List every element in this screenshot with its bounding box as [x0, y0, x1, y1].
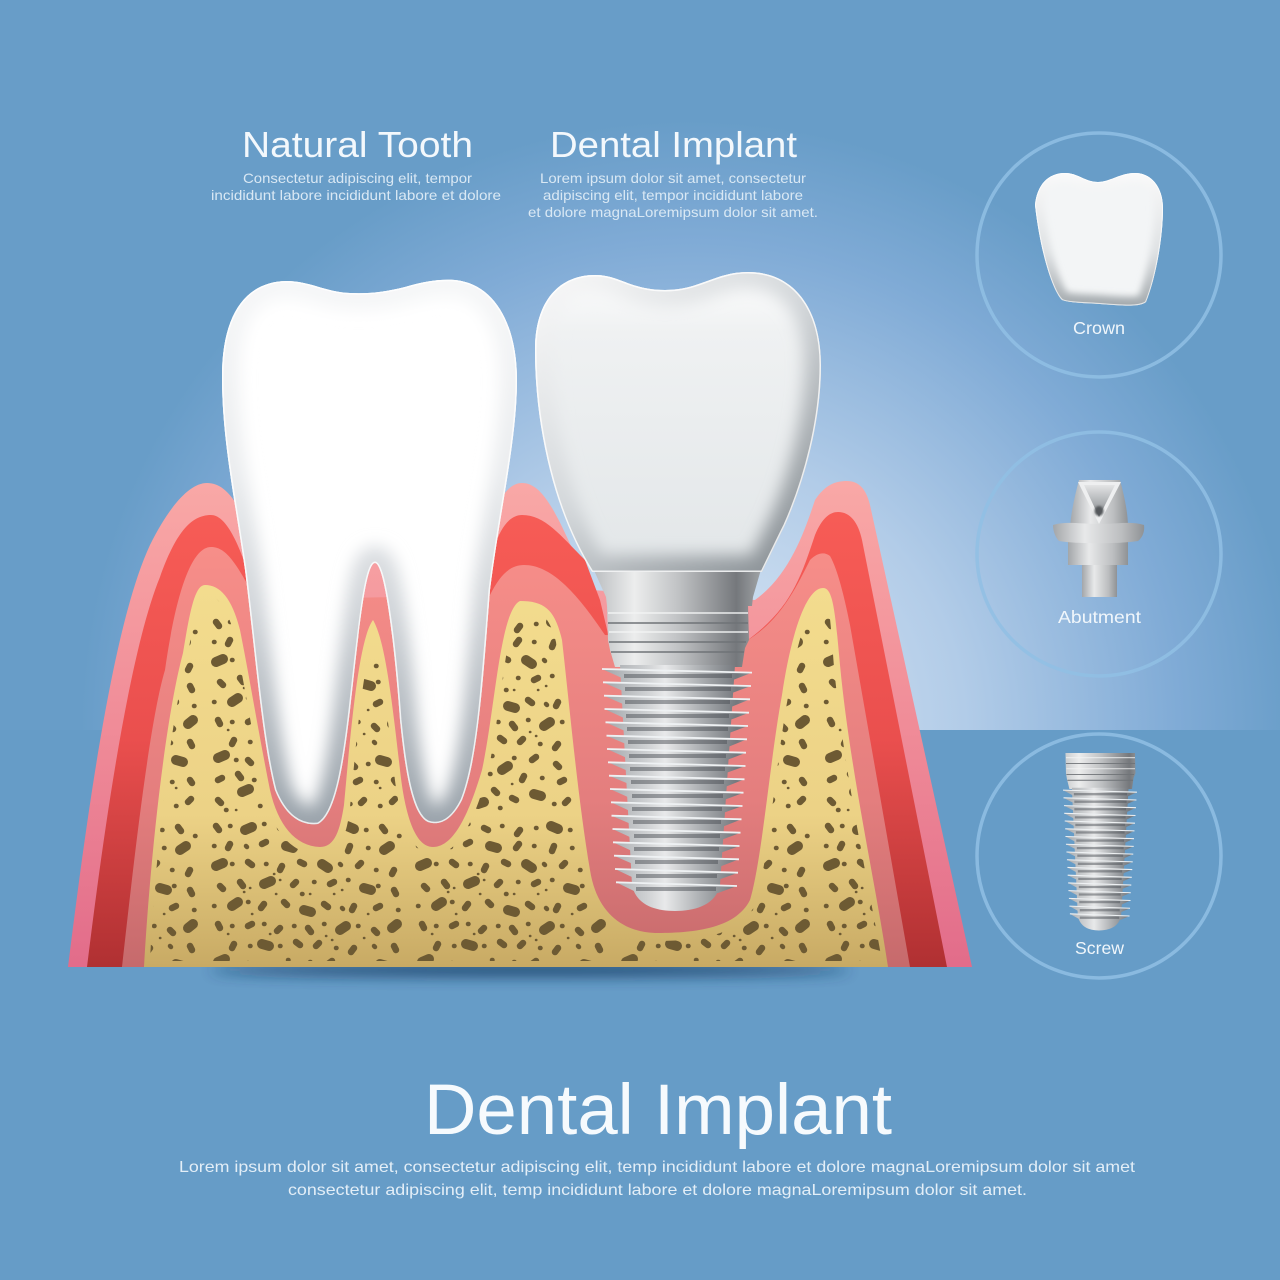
heading: dental implant: Dental Implant [550, 124, 797, 165]
natural tooth [212, 270, 527, 835]
dental implant description: adipiscing elit, tempor incididunt labore [543, 187, 803, 203]
body text: consectetur adipiscing elit, temp incididunt labore et dolore magnaLoremipsum dolor sit amet. [288, 1182, 1027, 1199]
dental implant description [528, 170, 818, 220]
heading: natural tooth: Natural Tooth [242, 124, 473, 165]
bone [144, 585, 888, 967]
natural tooth description: incididunt labore incididunt labore et dolore [211, 187, 501, 203]
implant crown [535, 272, 821, 572]
heading: natural tooth [211, 124, 501, 203]
natural tooth description: Consectetur adipiscing elit, tempor [243, 170, 472, 186]
implant screw [602, 605, 752, 911]
icon: screw [1063, 753, 1137, 930]
screw circle [977, 734, 1221, 978]
crown label: Crown [1073, 318, 1125, 338]
abutment circle [977, 432, 1221, 676]
gum red layer [87, 512, 947, 967]
abutment label: Abutment [1058, 607, 1141, 627]
crown circle [977, 133, 1221, 377]
body text: Lorem ipsum dolor sit amet, consectetur adipiscing elit, temp incididunt labore et dolore magnaLoremipsum dolor sit amet [179, 1159, 1136, 1176]
natural tooth description [211, 170, 501, 203]
icon: abutment [1053, 480, 1144, 597]
panel: abutment [977, 432, 1221, 676]
gum inner layer [122, 547, 910, 967]
dental implant description: Lorem ipsum dolor sit amet, consectetur [540, 170, 806, 186]
panel: crown [977, 133, 1221, 377]
ground shadow [210, 964, 850, 976]
diagram: gum, bone, tooth and implant [68, 262, 972, 976]
screw label: Screw [1075, 938, 1124, 958]
panel: screw [977, 734, 1221, 978]
gum outer layer [68, 481, 972, 967]
title: Dental Implant [424, 1071, 892, 1150]
implant abutment collar [592, 566, 762, 606]
body text [179, 1159, 1136, 1199]
heading: dental implant [528, 124, 818, 220]
icon: crown [1035, 173, 1163, 306]
dental implant description: et dolore magnaLoremipsum dolor sit amet. [528, 204, 818, 220]
